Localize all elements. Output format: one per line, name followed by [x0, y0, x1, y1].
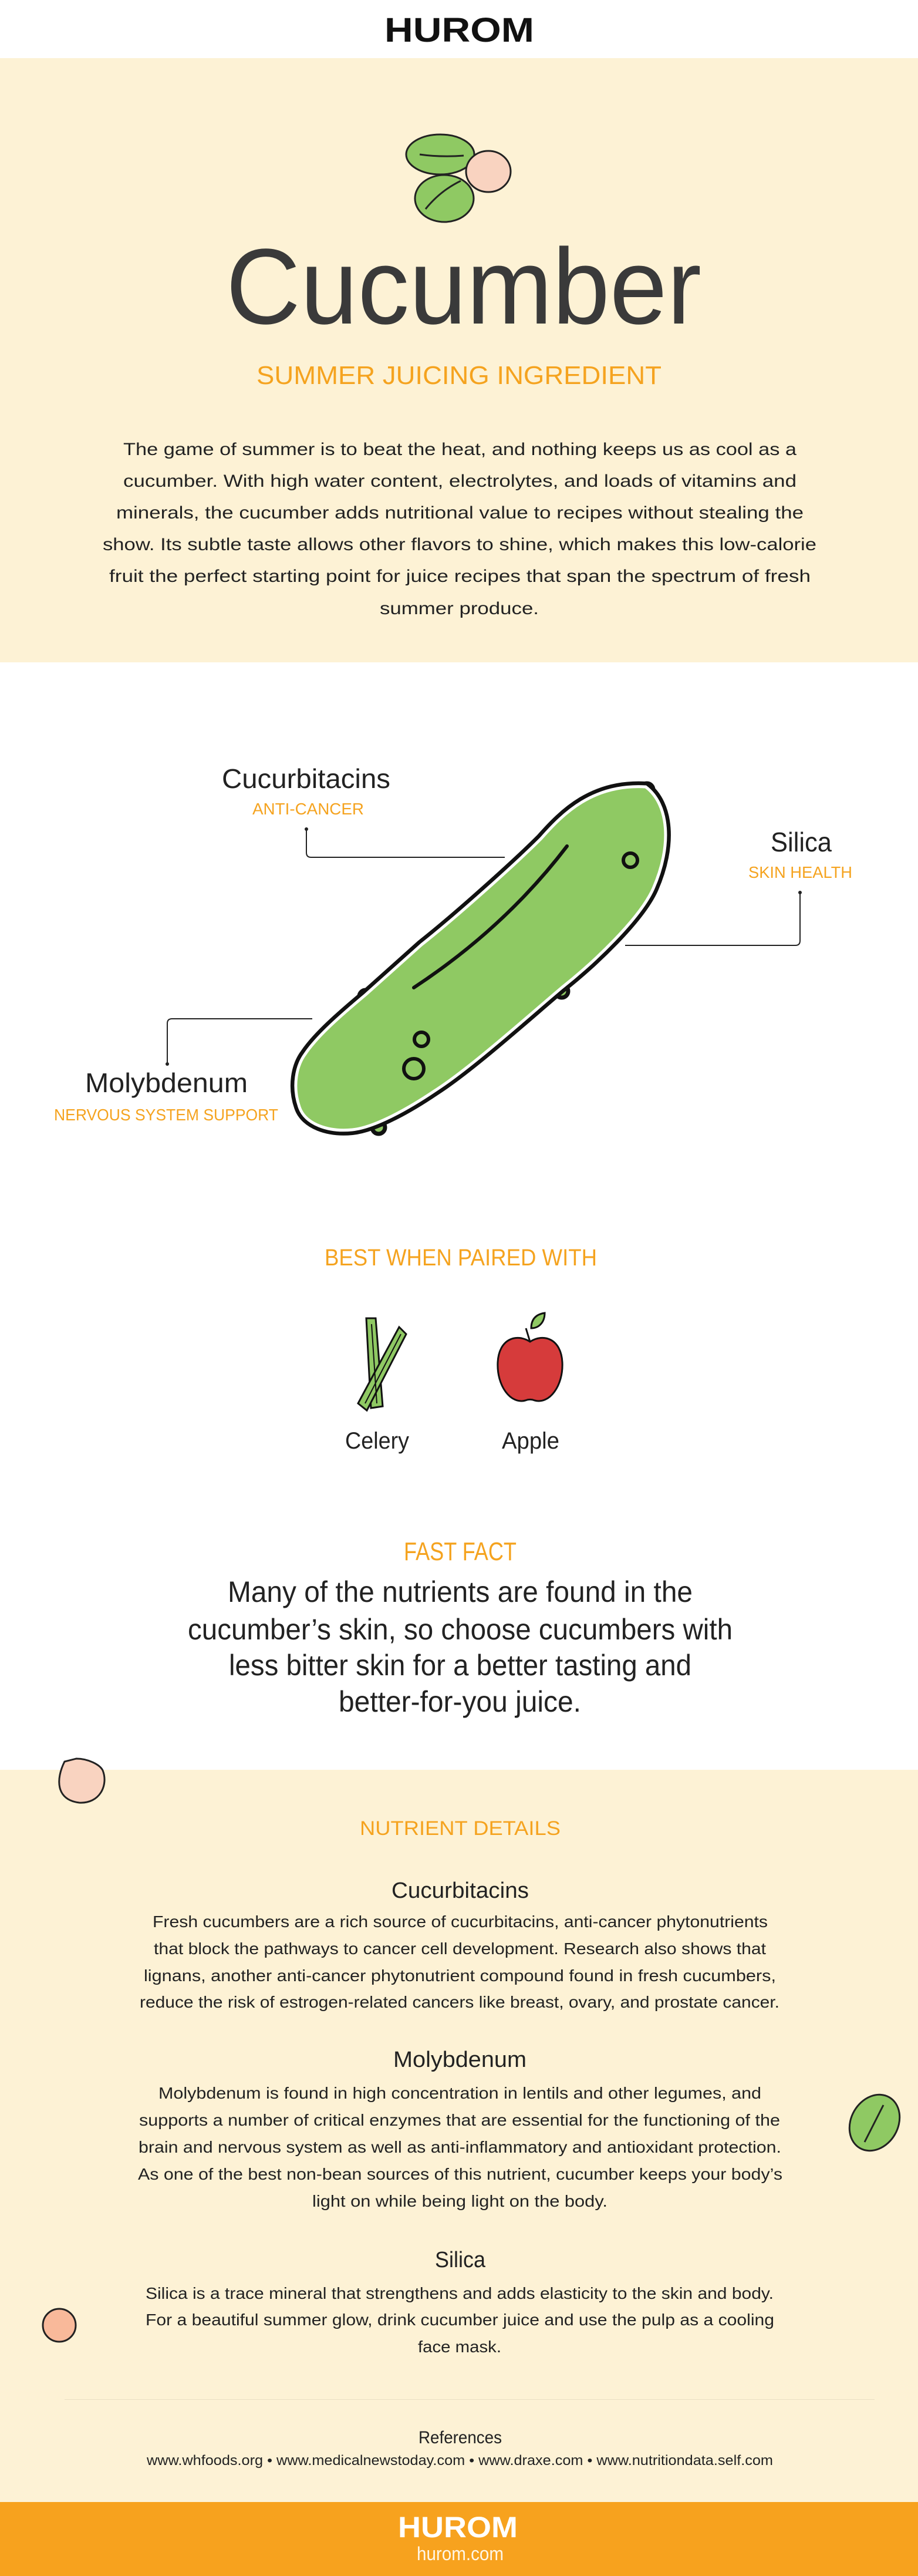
subtitle: SUMMER JUICING INGREDIENT [256, 361, 662, 390]
panel: fast fact: less bitter skin for a better tasting and [229, 1649, 691, 1682]
label: Apple: Apple [502, 1428, 559, 1454]
text block: Cucurbitacins: reduce the risk of estrogen-related cancers like breast, ovary, and prostate cancer. [140, 1993, 779, 2011]
label: Silica: SKIN HEALTH [748, 863, 852, 881]
text block: Silica: Silica [435, 2248, 486, 2272]
panel: fast fact: Many of the nutrients are found in the [228, 1575, 693, 1608]
header logo: HUROM [384, 11, 534, 49]
intro paragraph [103, 440, 816, 618]
text block: Molybdenum: As one of the best non-bean sources of this nutrient, cucumber keeps your body’s [138, 2165, 782, 2183]
text block: Cucurbitacins: that block the pathways to cancer cell development. Research also shows that [154, 1939, 766, 1958]
label: Cucurbitacins: Cucurbitacins [222, 763, 390, 794]
footer [0, 2502, 918, 2576]
intro paragraph: show. Its subtle taste allows other flavors to shine, which makes this low-calorie [103, 535, 816, 554]
title: Cucumber [226, 226, 701, 346]
references [146, 2428, 773, 2469]
text block: Silica: For a beautiful summer glow, drink cucumber juice and use the pulp as a cooling [146, 2311, 774, 2329]
icon: cucumber [296, 783, 666, 1134]
panel: fast fact: better-for-you juice. [339, 1685, 581, 1718]
text block: Molybdenum: brain and nervous system as well as anti-inflammatory and antioxidant protection. [139, 2138, 781, 2156]
text block: Molybdenum: supports a number of critical enzymes that are essential for the functioning of the [139, 2111, 780, 2129]
icon: leaf right [839, 2086, 910, 2160]
label: Molybdenum: NERVOUS SYSTEM SUPPORT [54, 1106, 278, 1124]
panel: fast fact: cucumber’s skin, so choose cucumbers with [188, 1613, 733, 1646]
intro paragraph: summer produce. [380, 599, 539, 618]
label: Celery: Celery [345, 1428, 409, 1454]
references: www.whfoods.org • www.medicalnewstoday.com • www.draxe.com • www.nutritiondata.self.com [146, 2453, 773, 2469]
label: Silica [625, 827, 852, 945]
chart: cucumber nutrients diagram [54, 763, 852, 1134]
text block: Cucurbitacins [140, 1878, 779, 2011]
text block: Molybdenum: Molybdenum is found in high concentration in lentils and other legumes, and [158, 2084, 761, 2102]
panel: fast fact: FAST FACT [404, 1537, 517, 1566]
icon: apple [498, 1313, 562, 1401]
intro paragraph: fruit the perfect starting point for juice recipes that span the spectrum of fresh [109, 567, 811, 586]
panel: nutrient details [0, 1759, 918, 2502]
label: Molybdenum [54, 1019, 312, 1124]
panel: fast fact [188, 1537, 733, 1718]
label: Silica: Silica [771, 827, 832, 857]
label: Cucurbitacins: ANTI-CANCER [252, 800, 364, 818]
text block: Silica: Silica is a trace mineral that strengthens and adds elasticity to the skin and body. [146, 2284, 774, 2302]
label: Cucurbitacins [222, 763, 505, 857]
text block: Molybdenum: Molybdenum [393, 2048, 526, 2072]
text block: Molybdenum: light on while being light on the body. [312, 2192, 608, 2210]
text block: Cucurbitacins: lignans, another anti-cancer phytonutrient compound found in fresh cucumbers, [144, 1966, 776, 1985]
text block: Silica [146, 2248, 774, 2356]
footer: hurom.com [417, 2543, 504, 2564]
intro paragraph: The game of summer is to beat the heat, and nothing keeps us as cool as a [123, 440, 797, 459]
text block: Cucurbitacins: Cucurbitacins [392, 1878, 529, 1903]
text block: Silica: face mask. [418, 2338, 501, 2356]
references: References [419, 2428, 502, 2447]
intro paragraph: cucumber. With high water content, electrolytes, and loads of vitamins and [123, 472, 797, 491]
panel: intro [0, 58, 918, 662]
label: Molybdenum: Molybdenum [85, 1068, 248, 1098]
icon: celery [358, 1318, 406, 1410]
text block: Cucurbitacins: Fresh cucumbers are a rich source of cucurbitacins, anti-cancer phytonutrients [153, 1912, 768, 1931]
icon: mint leaves and peach [406, 134, 511, 222]
heading: best when paired with: BEST WHEN PAIRED WITH [325, 1245, 597, 1271]
icon: peach slice top-left [59, 1759, 104, 1803]
text block: Molybdenum [138, 2048, 782, 2210]
footer: HUROM [398, 2511, 518, 2544]
panel: nutrient details: NUTRIENT DETAILS [360, 1817, 561, 1840]
intro paragraph: minerals, the cucumber adds nutritional value to recipes without stealing the [116, 503, 804, 523]
icon: peach left [43, 2309, 76, 2342]
